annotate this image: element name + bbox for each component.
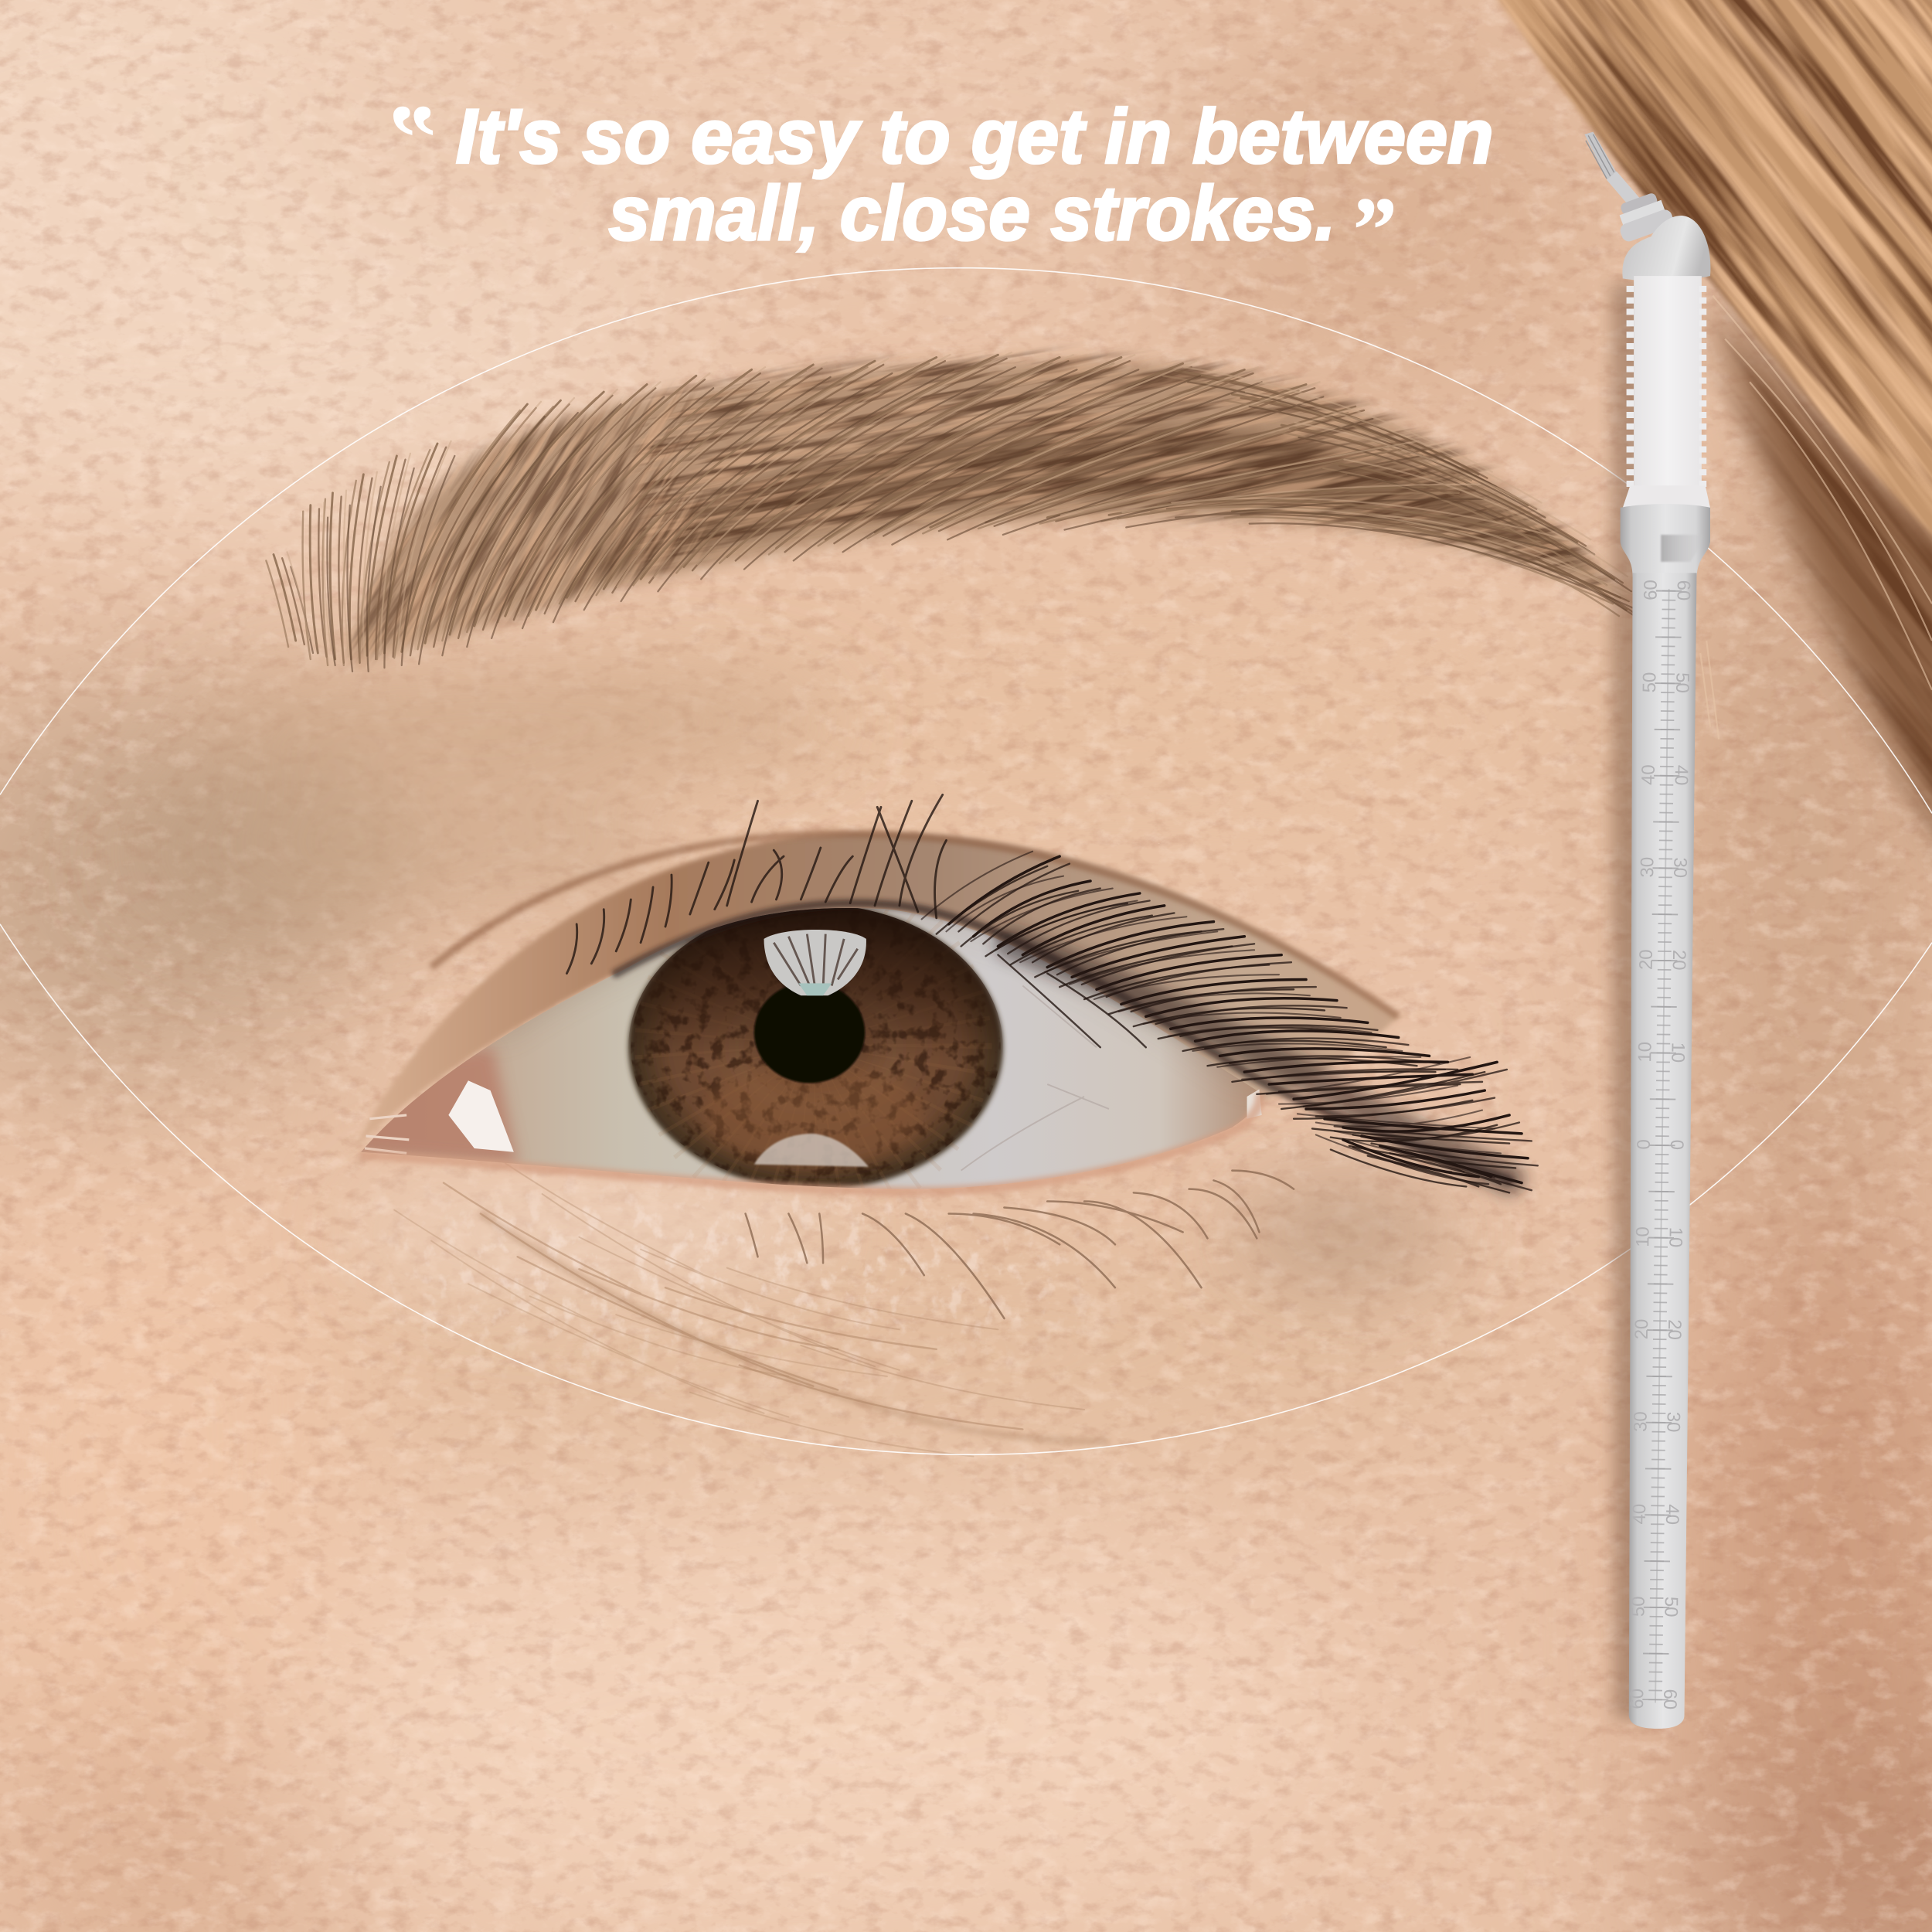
lower lid rim xyxy=(361,1093,1260,1192)
microblading pen xyxy=(1584,132,1710,1729)
ruler numbers left xyxy=(1627,580,1662,1709)
needle blades xyxy=(1584,132,1640,206)
ruler numbers left: 10 xyxy=(1634,1042,1656,1063)
pupil xyxy=(754,982,865,1083)
metal collar xyxy=(1621,504,1710,577)
iris xyxy=(628,904,1004,1190)
sclera xyxy=(351,862,1269,1196)
ruler numbers right: 30 xyxy=(1662,1412,1684,1433)
ruler numbers left: 50 xyxy=(1639,672,1660,693)
ruler numbers right: 50 xyxy=(1661,1597,1682,1617)
ruler numbers right: 0 xyxy=(1666,1140,1687,1150)
eye socket shading xyxy=(123,669,1454,1300)
outer corner glint xyxy=(1247,1089,1262,1119)
eyelid crease xyxy=(431,834,1399,1016)
brow hairs xyxy=(266,352,1644,672)
eye xyxy=(351,862,1269,1196)
ruler numbers left: 40 xyxy=(1638,764,1659,785)
quote line 1: It's so easy to get in between xyxy=(456,94,1493,179)
ruler numbers left: 10 xyxy=(1632,1226,1654,1247)
ruler numbers left: 30 xyxy=(1630,1411,1651,1432)
loose hair strands xyxy=(1700,296,1932,740)
closing quotation mark: ” xyxy=(1348,179,1395,282)
ruler numbers right: 10 xyxy=(1665,1227,1686,1247)
ruler numbers right: 40 xyxy=(1671,765,1692,786)
upper eyelashes xyxy=(566,794,1538,1192)
ruler numbers right: 10 xyxy=(1667,1042,1689,1063)
ruler numbers right: 50 xyxy=(1672,672,1692,693)
lens outline bottom arc xyxy=(0,924,1932,1454)
quote line 2: small, close strokes. xyxy=(609,171,1335,256)
ruler numbers left: 20 xyxy=(1631,1319,1652,1340)
hair strands top right xyxy=(1496,0,1932,536)
brow streak texture outer xyxy=(369,0,1849,995)
ruler numbers left: 20 xyxy=(1636,949,1657,970)
pen shadow xyxy=(1611,284,1657,1719)
ruler numbers left: 50 xyxy=(1628,1596,1649,1617)
lens outline top arc xyxy=(0,268,1932,813)
lower eyelashes xyxy=(746,1171,1294,1318)
ruler numbers right: 20 xyxy=(1664,1319,1685,1340)
collar recess xyxy=(1661,535,1702,562)
shaded hair band below hairline xyxy=(1702,289,1932,862)
under-eye wrinkles xyxy=(394,1163,1109,1457)
upper eyelid xyxy=(355,832,1399,1148)
nozzle collar xyxy=(1611,189,1675,243)
iris highlight bottom xyxy=(754,1134,869,1167)
ruler numbers left: 30 xyxy=(1637,857,1658,878)
ruler scale xyxy=(1627,580,1694,1709)
ruler numbers right: 40 xyxy=(1662,1504,1682,1525)
opening quotation mark: ” xyxy=(389,86,436,189)
iris highlight top xyxy=(764,930,866,995)
ruler numbers left: 40 xyxy=(1629,1504,1650,1525)
tear duct glint xyxy=(448,1080,514,1152)
ruler numbers left: 0 xyxy=(1634,1139,1655,1150)
ruler numbers right: 30 xyxy=(1669,857,1691,878)
pen shaft xyxy=(1629,573,1696,1729)
ruler numbers left: 60 xyxy=(1640,580,1662,600)
ruler ticks xyxy=(1655,590,1669,1700)
under-eye flecks xyxy=(247,1084,1478,1478)
ruler numbers right xyxy=(1659,580,1694,1709)
ruler numbers right: 20 xyxy=(1668,950,1689,971)
tear duct detail xyxy=(365,1115,409,1153)
pen dome head xyxy=(1622,216,1710,281)
eyebrow xyxy=(0,0,1849,1061)
ruler numbers right: 60 xyxy=(1659,1689,1680,1709)
quote text xyxy=(389,86,1493,282)
major ruler ticks xyxy=(1655,590,1669,1700)
ruler numbers left: 60 xyxy=(1627,1689,1648,1709)
brow streak texture inner xyxy=(0,0,1061,1061)
centre line xyxy=(1655,589,1669,1702)
ruler numbers right: 60 xyxy=(1673,580,1694,600)
rubber grip xyxy=(1623,276,1710,508)
